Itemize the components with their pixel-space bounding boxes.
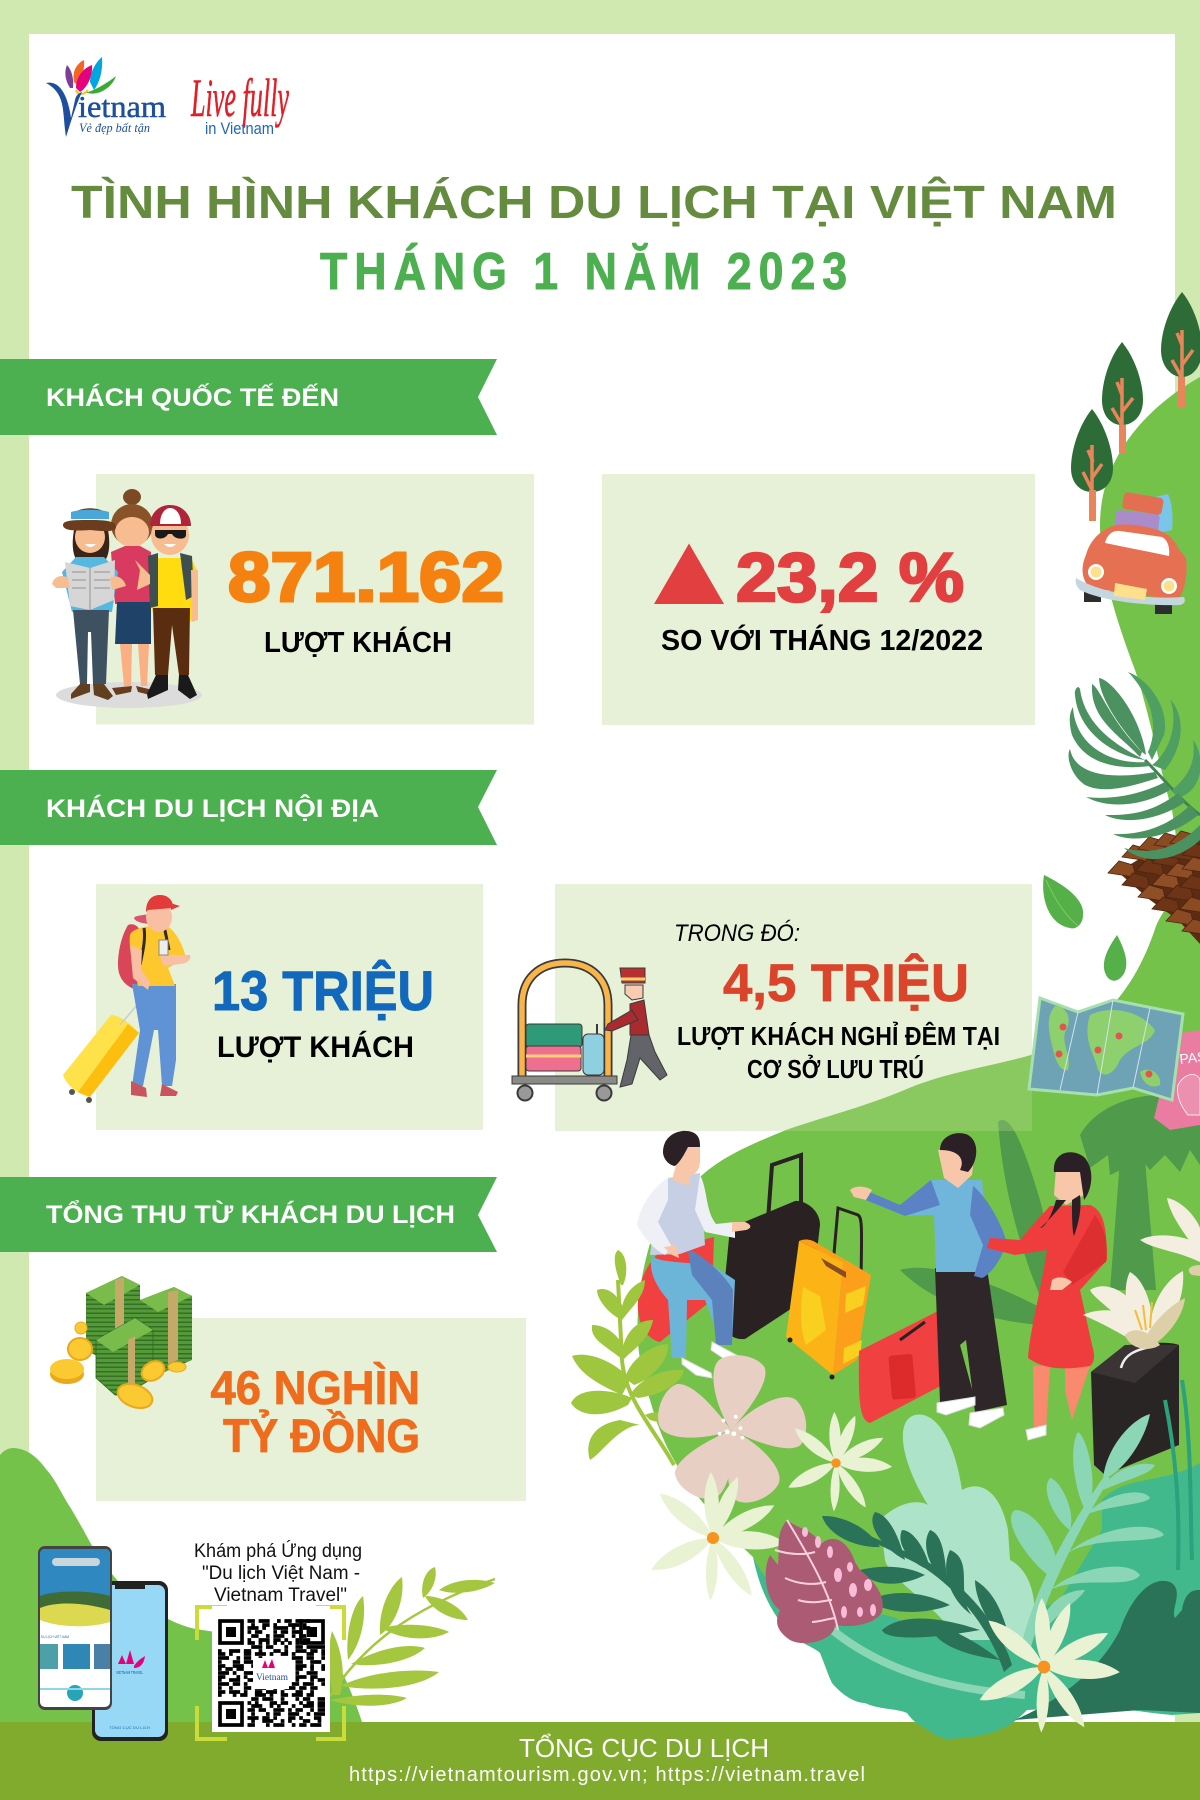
label: overnight stays at accommodation: CƠ SỞ LƯU TRÚ xyxy=(747,1053,924,1084)
footer text: TỔNG CỤC DU LỊCH xyxy=(519,1733,769,1763)
panel: international arrivals count xyxy=(52,474,534,724)
logo: Vietnam xyxy=(46,57,166,137)
ribbon: total revenue: TỔNG THU TỪ KHÁCH DU LỊCH xyxy=(46,1199,455,1229)
illustration: black suitcase on the right xyxy=(1091,1343,1179,1475)
left green hill xyxy=(0,1448,363,1725)
illustration: daisy lower xyxy=(975,1598,1121,1733)
text: app invitation: Vietnam Travel" xyxy=(214,1585,347,1606)
illustration: seated man xyxy=(637,1131,750,1378)
illustration: dark background plants xyxy=(900,1095,1200,1325)
subtitle: THÁNG 1 NĂM 2023 xyxy=(320,243,847,301)
logo: Live fully in Vietnam xyxy=(191,68,289,138)
illustration: slim grass blades xyxy=(1165,1380,1192,1570)
stat: 4,5 triệu: 4,5 TRIỆU xyxy=(723,952,969,1013)
icon: car with luggage xyxy=(1076,492,1187,614)
footer text xyxy=(349,1733,865,1786)
QR code with brackets xyxy=(197,1606,344,1739)
illustration: daisy upper xyxy=(785,1412,893,1512)
illustration: black suitcase with handle xyxy=(722,1155,820,1339)
label: visits: LƯỢT KHÁCH xyxy=(217,1030,414,1064)
panel: revenue figure xyxy=(50,1276,526,1501)
icon: money stacks and coins xyxy=(50,1276,192,1412)
illustration: standing man xyxy=(850,1133,1007,1428)
illustration: olive branch xyxy=(329,1567,495,1706)
icon: phones: TỔNG CỤC DU LỊCH xyxy=(109,1725,150,1730)
logo: Vietnam: Vẻ đẹp bất tận xyxy=(79,120,150,135)
illustration: lily flower right xyxy=(1083,1271,1185,1349)
icon: folded world map xyxy=(1029,998,1183,1100)
ribbon: domestic visitors xyxy=(0,770,497,845)
illustration: mint big leaf xyxy=(880,1414,1035,1640)
stat: 13 triệu: 13 TRIỆU xyxy=(212,959,434,1022)
text: app invitation: "Du lịch Việt Nam - xyxy=(202,1563,360,1584)
panel: month-on-month change xyxy=(602,474,1035,725)
label: overnight stays at accommodation: LƯỢT KHÁCH NGHỈ ĐÊM TẠI xyxy=(677,1021,1000,1051)
icon: up triangle xyxy=(654,544,724,604)
ribbon: international visitors: KHÁCH QUỐC TẾ ĐẾN xyxy=(46,382,339,412)
label: compared with 12/2022: SO VỚI THÁNG 12/2022 xyxy=(661,623,983,657)
footer bar xyxy=(0,1722,1200,1800)
illustration: olive fern xyxy=(571,1250,690,1465)
ribbon: international visitors xyxy=(0,359,497,435)
label: visits: LƯỢT KHÁCH xyxy=(264,625,452,659)
icon: backpacker with suitcase xyxy=(63,895,190,1103)
stat: 23,2 percent: 23,2 % xyxy=(736,539,964,616)
stat: 46 nghìn tỷ đồng xyxy=(210,1361,420,1462)
illustration: pine cone xyxy=(1108,831,1200,944)
panel: domestic visitors count xyxy=(63,884,483,1130)
ribbon: domestic visitors: KHÁCH DU LỊCH NỘI ĐỊA xyxy=(46,793,379,823)
title: TÌNH HÌNH KHÁCH DU LỊCH TẠI VIỆT NAM xyxy=(71,176,1117,228)
stat: 871.162: 871.162 xyxy=(228,538,504,616)
illustration: mint fern xyxy=(1011,1414,1164,1650)
icon: bellhop with luggage cart xyxy=(512,963,667,1100)
stat: 46 nghìn tỷ đồng: 46 NGHÌN xyxy=(210,1361,420,1414)
tree group on the hill xyxy=(1071,292,1200,521)
icon: three tourists xyxy=(52,489,202,708)
illustration: daisy left xyxy=(647,1472,786,1601)
illustration: red suitcase under seated man xyxy=(638,1237,714,1342)
illustration: mint stem curve xyxy=(830,1628,1025,1695)
label: of which: TRONG ĐÓ: xyxy=(674,920,800,947)
illustration: cream flower top right xyxy=(1140,1198,1200,1276)
illustration: teal foliage base xyxy=(753,1463,1200,1739)
illustration: maroon spotted leaf xyxy=(766,1520,883,1643)
icon: passport xyxy=(1154,1030,1200,1130)
illustration: dark fern xyxy=(822,1512,1012,1672)
icon: phones: DU LỊCH VIỆT NAM xyxy=(41,1634,69,1639)
QR code with brackets: Vietnam xyxy=(256,1672,288,1682)
illustration: dark right leaf xyxy=(1015,1581,1200,1720)
text: app invitation: Khám phá Ứng dụng xyxy=(194,1540,362,1562)
logo: Live fully in Vietnam: in Vietnam xyxy=(205,119,274,138)
illustration: yellow suitcase xyxy=(786,1208,871,1380)
ribbon: total revenue xyxy=(0,1177,497,1252)
illustration: woman in red dress xyxy=(987,1152,1107,1440)
icon: phones xyxy=(38,1546,168,1741)
text: app invitation xyxy=(194,1540,362,1606)
icon: green leaf one xyxy=(1043,875,1083,928)
icon: phones: VIETNAM TRAVEL xyxy=(116,1670,143,1675)
icon: green leaf two xyxy=(1104,935,1126,981)
infographic canvas: Live fully xyxy=(191,68,289,128)
stat: 46 nghìn tỷ đồng: TỶ ĐỒNG xyxy=(223,1409,420,1462)
label: overnight stays at accommodation xyxy=(677,1021,1000,1084)
logo: Vietnam: ietnam xyxy=(78,89,166,124)
panel: overnight guests count xyxy=(512,884,1032,1131)
illustration: pink flower xyxy=(652,1352,809,1509)
right green hill xyxy=(638,377,1200,1680)
illustration: palm frond xyxy=(1069,672,1200,859)
illustration: red suitcase on the ground xyxy=(859,1310,965,1423)
footer text: https://vietnamtourism.gov.vn; https://vietnam.travel xyxy=(349,1764,865,1786)
